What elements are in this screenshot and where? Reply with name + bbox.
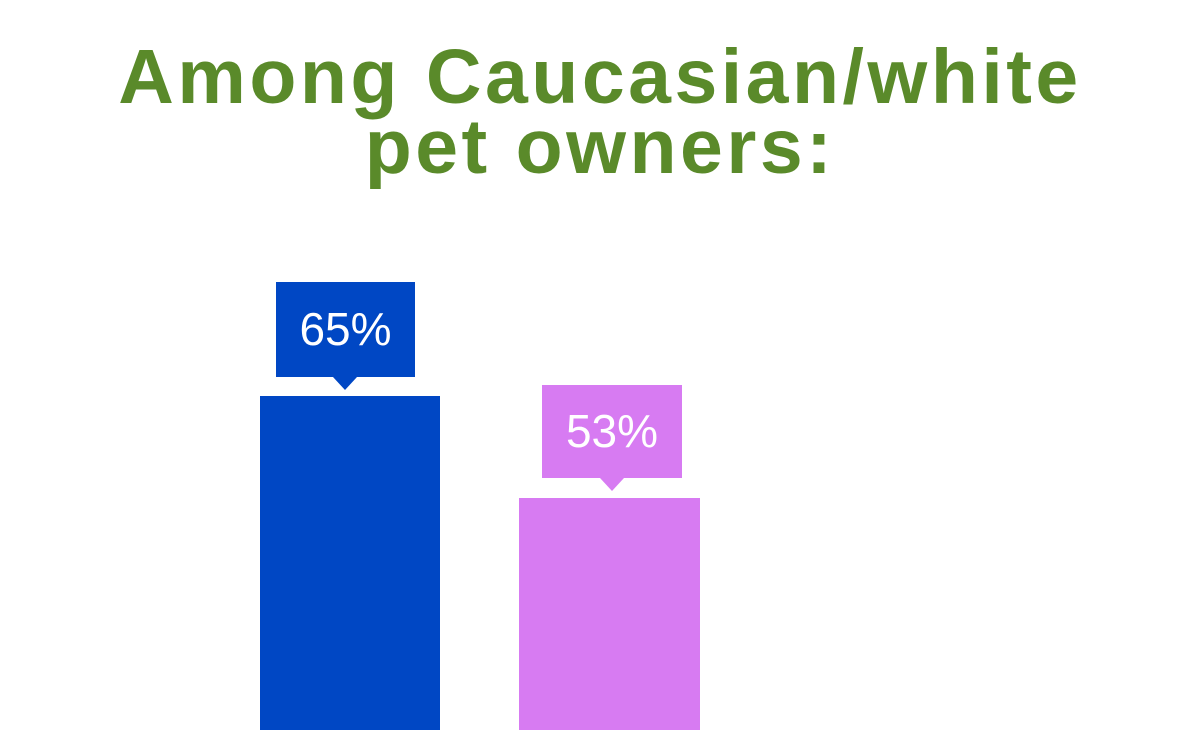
label: 53% [542, 385, 682, 478]
title: pet owners: [365, 104, 835, 190]
bar: 53% [519, 498, 700, 730]
label: 65%: 65% [299, 303, 392, 355]
title [118, 34, 1082, 190]
title: Among Caucasian/white [118, 34, 1082, 120]
label: 53%: 53% [566, 405, 658, 457]
bar: 65% [260, 396, 440, 730]
label: 65% [276, 282, 415, 377]
